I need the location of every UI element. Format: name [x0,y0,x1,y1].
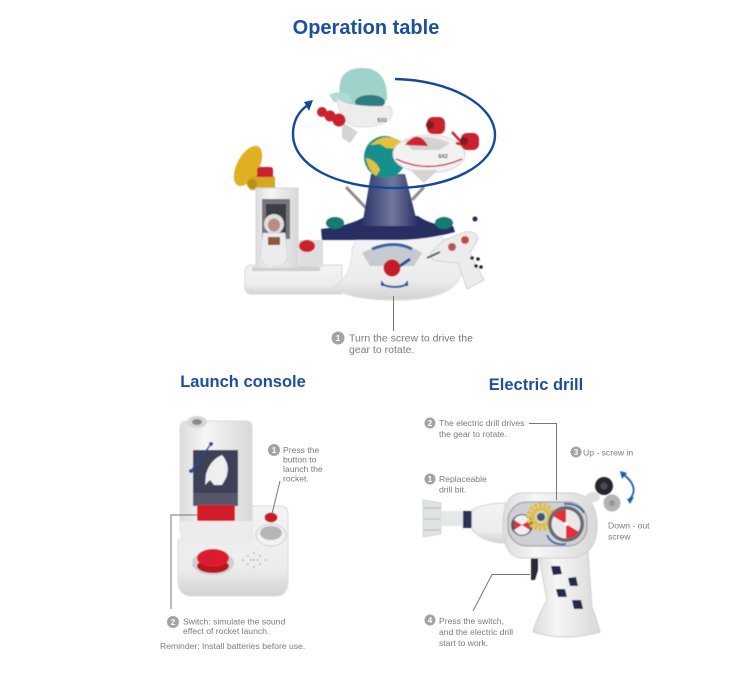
callout: press the button: 1 [272,446,277,455]
callout: drill drives gear: the gear to rotate. [439,429,507,439]
callout: up screw in: Up - screw in [583,448,633,458]
callout: press the button: rocket. [283,474,309,484]
callout: switch: 2 [171,618,176,627]
rocket [205,455,228,485]
globe [364,136,406,178]
speaker holes [242,552,267,568]
callout: down out screw: screw [608,532,631,542]
astronaut [260,214,288,266]
illustration: electric drill [423,471,634,637]
callout: drill drives gear: The electric drill drives [439,418,524,428]
drill handle [533,552,600,637]
callout: switch [167,515,285,636]
arrow: up and down [623,474,634,499]
red switch [197,505,235,521]
illustration: operation table toy [228,68,484,300]
small drill [427,216,484,289]
callout: switch: effect of rocket launch. [183,626,269,636]
red console button [299,240,323,267]
satellite dish [228,141,275,191]
small red button [264,512,278,522]
screw cap [586,492,600,502]
UFO with teal dome [317,68,392,143]
reminder note: Reminder: Install batteries before use. [160,641,305,651]
drill bit [423,500,441,537]
navy star base [321,216,455,240]
teal buttons [326,217,344,229]
yellow gear [529,505,553,529]
arrow: rotation ring [293,79,495,188]
arrow: rocket tilt [191,444,211,471]
small red gear [511,514,533,536]
callout: down out screw: Down - out [608,520,650,530]
UFO with red engines [393,117,479,183]
astronaut booth [256,188,298,268]
rocket screen [193,450,238,506]
callout: up screw in: 3 [574,448,579,457]
base platform [245,265,342,294]
callout: press the switch [424,574,530,648]
support struts [346,187,366,208]
console base [178,506,288,596]
callout: down out screw [608,520,650,542]
callout: press the switch: Press the switch, [439,616,504,626]
UFO with teal dome: SX3 [377,118,387,124]
callout: turn the screw: 1 [336,334,341,343]
callout: replaceable drill bit: 1 [428,475,433,484]
launch button [192,551,234,575]
illustration: launch console [178,416,288,596]
callout: press the button: Press the [283,445,320,455]
callout: turn the screw: Turn the screw to drive the [349,332,473,344]
callout: switch: Switch: simulate the sound [183,616,285,626]
callout: drill drives gear: 2 [428,419,433,428]
heading: Launch console: Launch console [180,373,306,391]
round white base [333,234,462,300]
callout: replaceable drill bit: drill bit. [439,484,466,494]
gear window [508,502,587,546]
callout: press the button: button to [283,454,317,464]
callout: press the button [268,444,323,514]
gauge and screw [362,244,422,287]
callout: turn the screw [332,296,473,356]
gear rotation arrows [564,504,584,513]
callout: press the switch: and the electric drill [439,627,513,637]
handle squares [551,566,583,609]
drill body [503,493,597,558]
callout: replaceable drill bit [424,474,487,494]
switch trigger [531,558,538,580]
UFO with red engines: SX2 [438,154,448,160]
callout: drill drives gear [424,418,556,500]
callout: turn the screw: gear to rotate. [349,344,414,356]
column [362,174,418,226]
callout: press the switch: start to work. [439,638,488,648]
callout: press the button: launch the [283,464,323,474]
drill nose [472,503,505,543]
large red gear [548,506,584,542]
title: Operation table: Operation table [293,17,439,39]
callout: press the switch: 4 [428,616,433,625]
cup [256,524,286,546]
tower [180,421,252,530]
heading: Electric drill: Electric drill [489,376,583,394]
callout: replaceable drill bit: Replaceable [439,474,487,484]
